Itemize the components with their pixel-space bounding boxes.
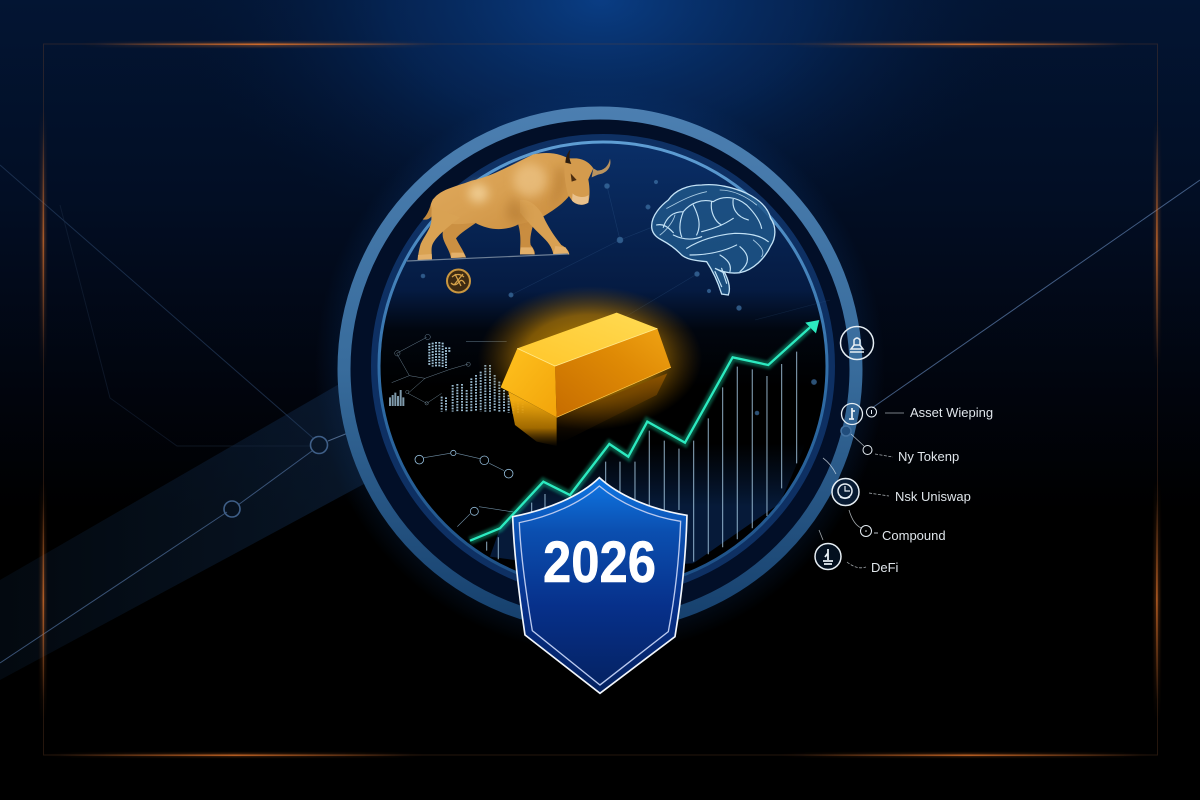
shield year: 2026 (543, 530, 656, 595)
icons and labels (815, 326, 993, 575)
bull ground line (407, 254, 568, 261)
network nodes inside circle (421, 180, 830, 415)
label: Compound (849, 510, 946, 543)
shield (513, 478, 687, 693)
icon: golden bull (418, 149, 610, 260)
label: Ny Tokenp: Ny Tokenp (898, 449, 959, 464)
icon: wireframe brain (652, 185, 775, 295)
network nodes lower left (415, 450, 513, 527)
label: Asset Wieping: Asset Wieping (910, 405, 993, 420)
gold bar (478, 286, 702, 446)
label: Ny Tokenp (841, 426, 959, 464)
diagonal band with network line (0, 165, 1200, 680)
icon: top badge (840, 326, 874, 360)
icon: gold coin (447, 270, 470, 292)
label: Asset Wieping (842, 404, 993, 424)
label: Compound: Compound (882, 528, 946, 543)
bar chart (487, 327, 820, 570)
label: Nsk Uniswap (823, 458, 971, 506)
label: DeFi (815, 530, 899, 575)
label: DeFi: DeFi (871, 560, 899, 575)
data matrix graphic (390, 334, 523, 413)
label: Nsk Uniswap: Nsk Uniswap (895, 489, 971, 504)
growth line arrow (470, 320, 819, 541)
circular frame (344, 113, 856, 625)
